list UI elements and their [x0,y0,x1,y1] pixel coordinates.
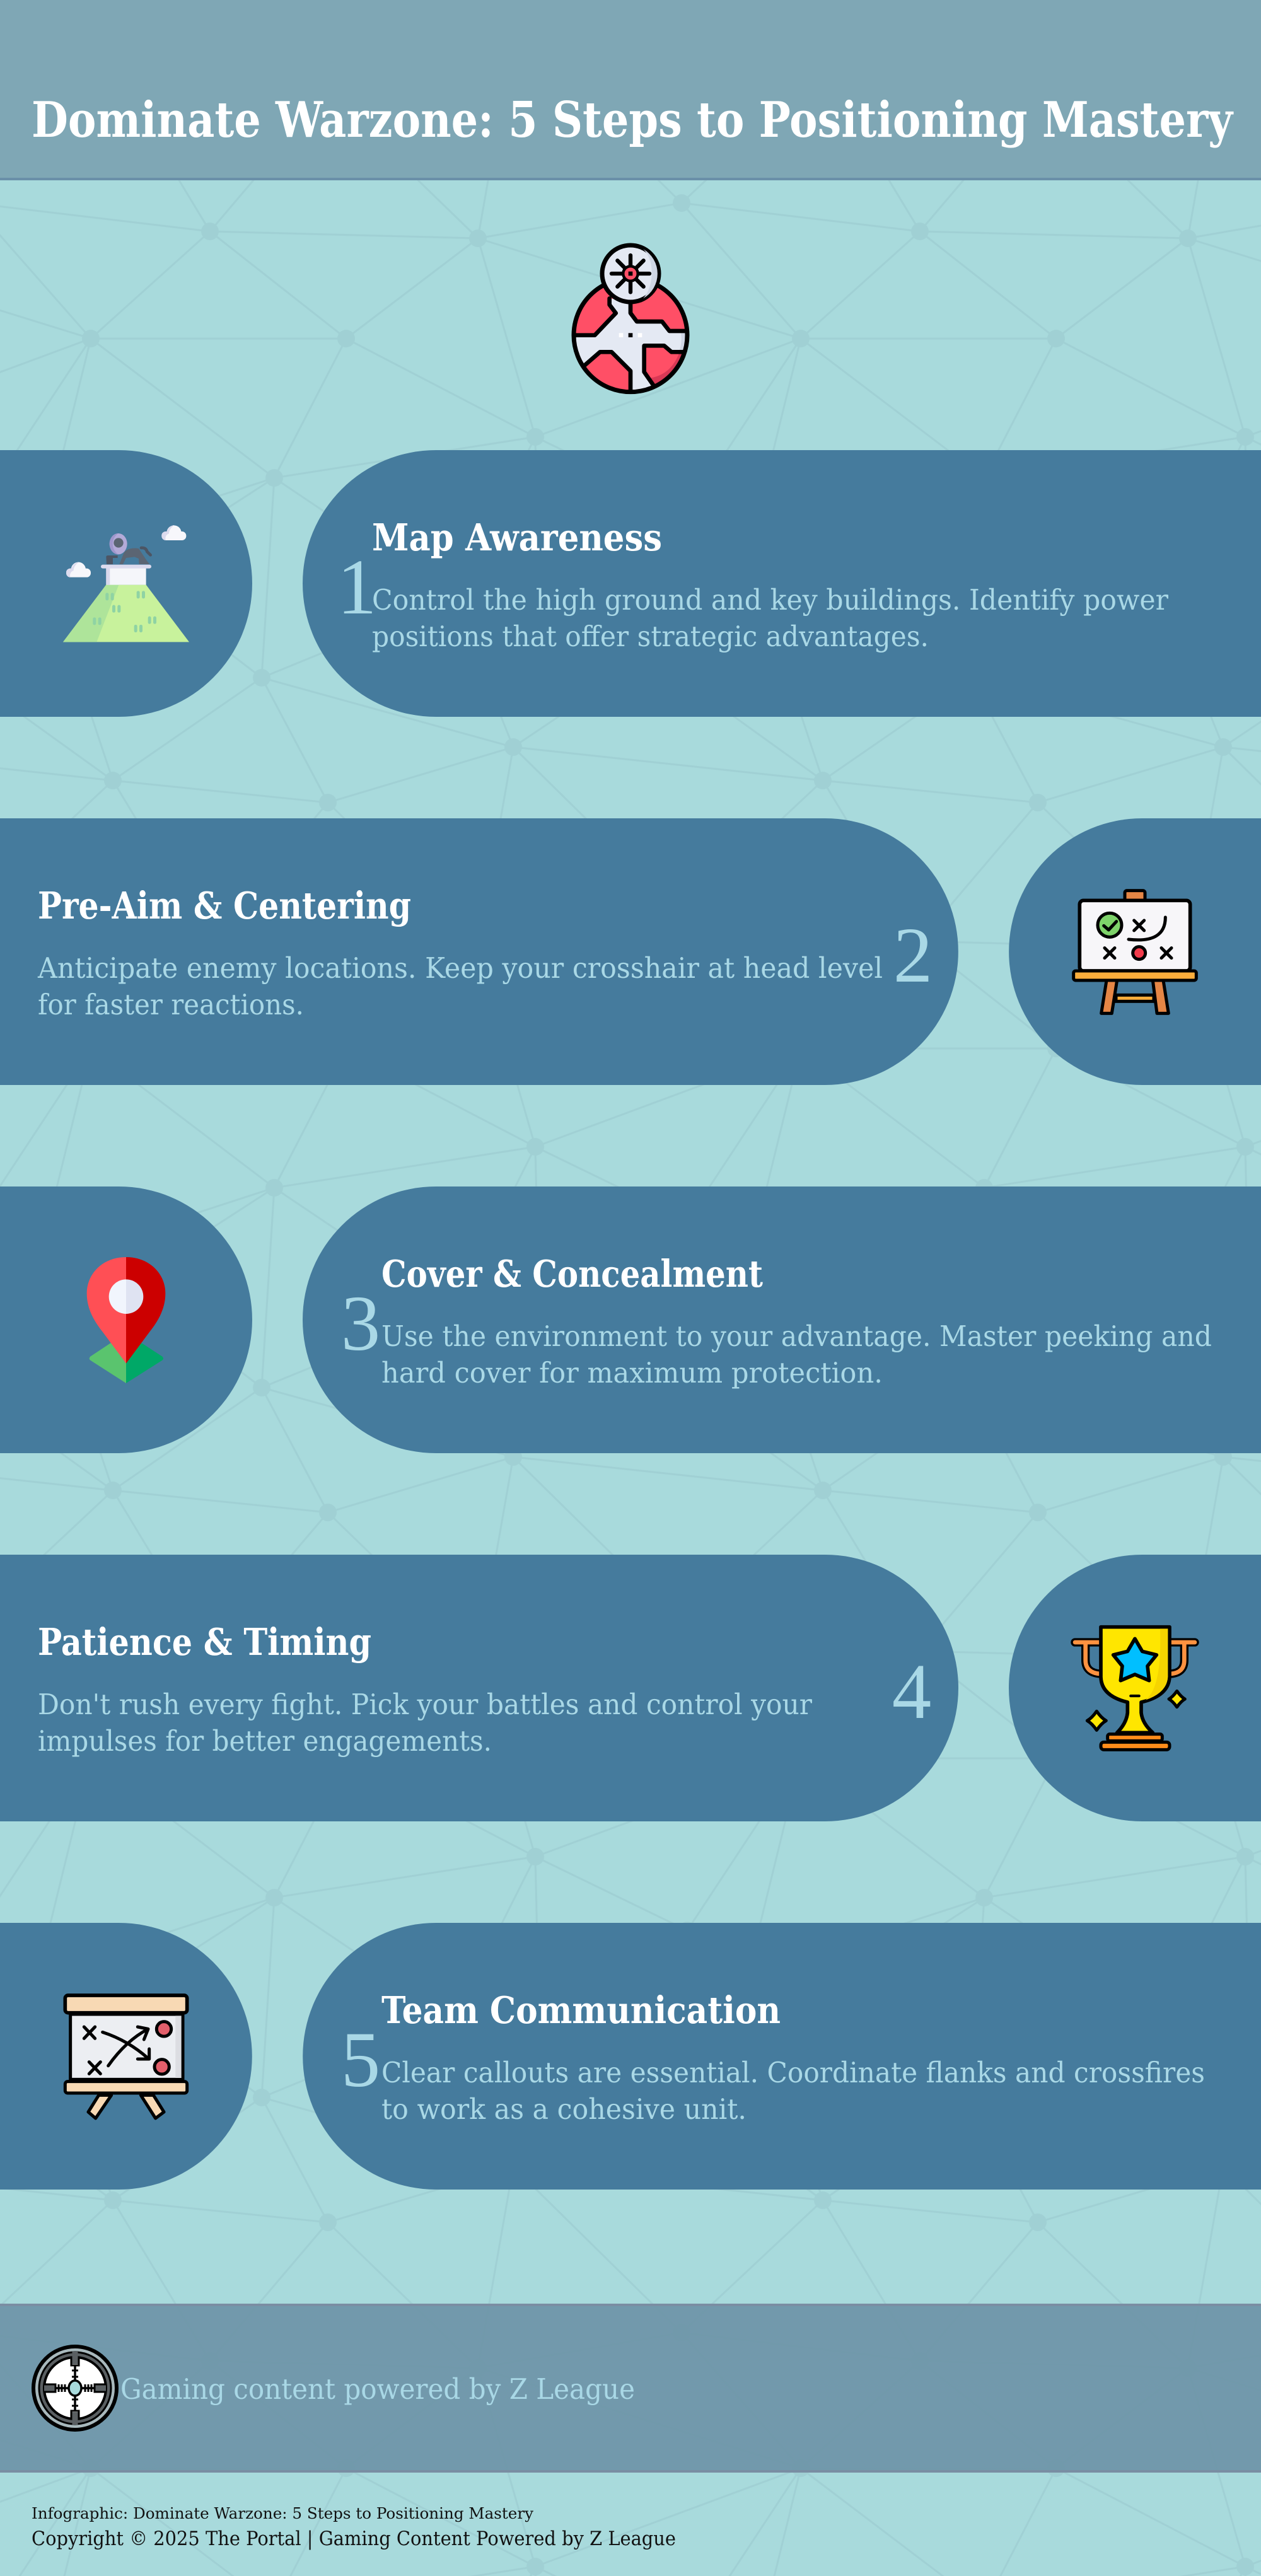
icon: map pin [87,1257,165,1383]
heading: pre-aim: Pre-Aim & Centering [38,884,411,927]
heading: cover and concealment: Cover & Concealment [381,1252,763,1296]
credit: copyright: Copyright © 2025 The Portal | Gaming Content Powered by Z League [32,2527,676,2550]
body text: step 2: Anticipate enemy locations. Keep your crosshair at head level [37,951,883,985]
body text: step 2: for faster reactions. [38,988,304,1021]
icon: crosshair logo [33,2347,117,2430]
body text: step 5: Clear callouts are essential. Coordinate flanks and crossfires [381,2056,1205,2089]
heading: map awareness: Map Awareness [372,516,662,559]
step number 2: 2 [893,912,933,999]
body text: step 2 [37,951,883,1021]
icon: trophy [1075,1627,1195,1749]
panel: step 3 content pill [303,1186,1261,1453]
body text: step 3: Use the environment to your advantage. Master peeking and [381,1320,1212,1353]
footer tagline: Gaming content powered by Z League [120,2372,635,2406]
body text: step 4: impulses for better engagements. [38,1724,492,1758]
body text: step 5 [381,2056,1205,2126]
body text: step 1: positions that offer strategic advantages. [372,620,929,653]
panel: step 5 content pill [303,1923,1261,2190]
body text: step 4: Don't rush every fight. Pick your battles and control your [38,1688,812,1721]
panel: step 4 icon pill [1009,1555,1261,1821]
panel: step 5 icon pill [0,1923,252,2190]
body text: step 5: to work as a cohesive unit. [381,2092,747,2126]
step number 5: 5 [341,2017,380,2104]
step number 3: 3 [341,1280,380,1367]
credit: infographic title: Infographic: Dominate Warzone: 5 Steps to Positioning Mastery [32,2505,533,2522]
step number 4: 4 [892,1649,931,1736]
panel: step 3 icon pill [0,1186,252,1453]
header band [0,0,1261,180]
body text: step 3 [381,1320,1212,1390]
step 3: cover and concealment [0,1186,1261,1453]
panel: step 1 icon pill [0,450,252,717]
icon: play diagram board [65,1995,187,2118]
body text: step 3: hard cover for maximum protection. [381,1356,883,1390]
heading: team communication: Team Communication [381,1988,781,2032]
body text: step 1: Control the high ground and key buildings. Identify power [372,583,1168,617]
step 1: map awareness [0,450,1261,717]
footer band [0,2304,1261,2473]
step 4: patience and timing [0,1555,1261,1821]
icon: tactics easel [1074,891,1196,1013]
step 5: team communication [0,1923,1261,2190]
panel: step 2 content pill [0,818,958,1085]
step 2: pre-aim and centering [0,818,1261,1085]
step number 1: 1 [337,544,376,631]
body text: step 4 [38,1688,812,1758]
icon: globe with virus marker [574,245,687,392]
body text: step 1 [372,583,1168,653]
panel: step 1 content pill [303,450,1261,717]
heading: patience and timing: Patience & Timing [38,1620,371,1664]
footer credit lines [32,2505,676,2550]
panel: step 2 icon pill [1009,818,1261,1085]
panel: step 4 content pill [0,1555,958,1821]
icon: hilltop tower [63,525,189,642]
